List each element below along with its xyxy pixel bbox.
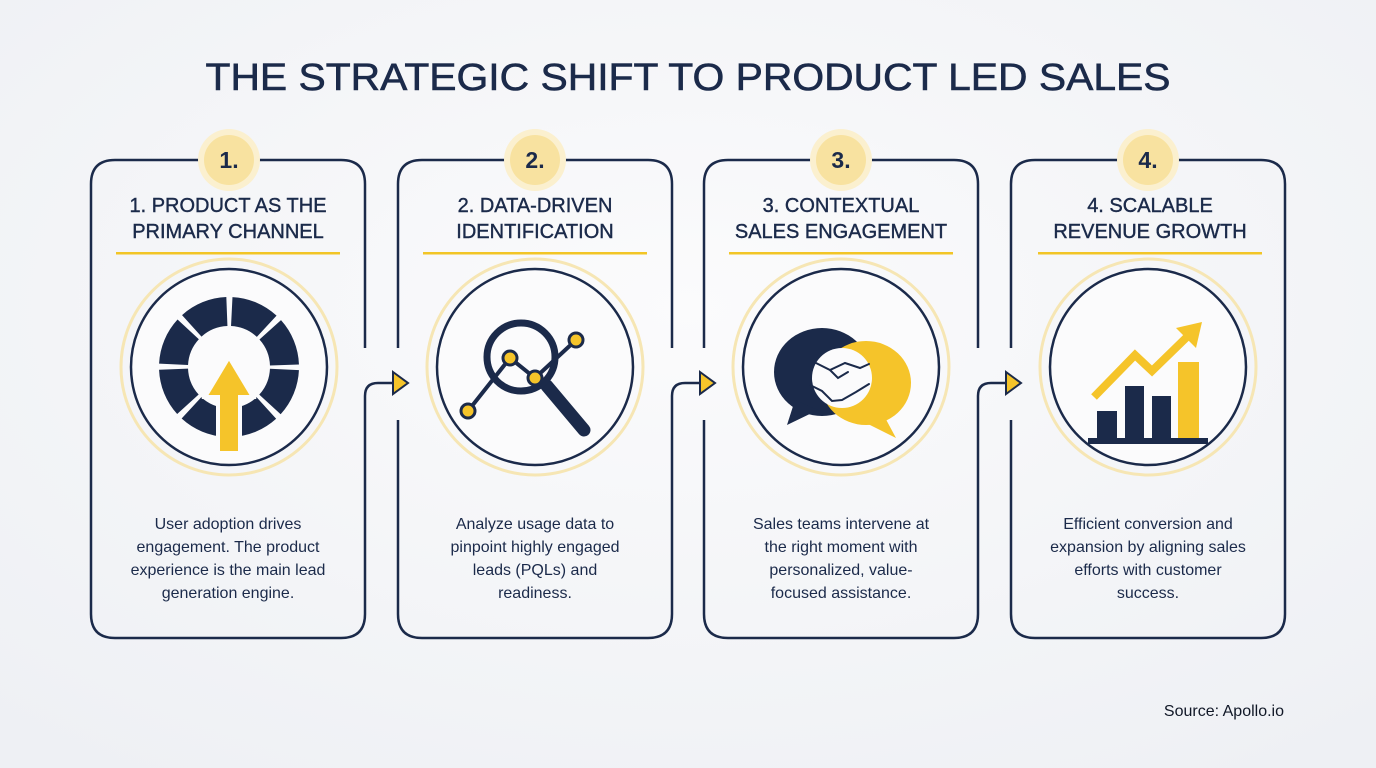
icon: bar chart growth xyxy=(1040,259,1256,475)
heading 2: IDENTIFICATION xyxy=(456,221,614,243)
icon: magnifier chart xyxy=(427,259,643,475)
title: THE STRATEGIC SHIFT TO PRODUCT LED SALES xyxy=(206,57,1170,99)
badge 4 xyxy=(1117,129,1179,191)
icon: growth ring xyxy=(121,259,337,475)
badge 2 xyxy=(504,129,566,191)
heading 2: 2. DATA-DRIVEN xyxy=(458,195,612,217)
heading 4 xyxy=(1053,195,1247,243)
heading 1: PRIMARY CHANNEL xyxy=(132,221,324,243)
text 4: efforts with customer xyxy=(1074,562,1222,579)
icon: handshake bubbles xyxy=(733,259,949,475)
badge 3 xyxy=(810,129,872,191)
source note: Source: Apollo.io xyxy=(1164,703,1284,720)
badge 3: 3. xyxy=(831,147,851,173)
badge 2: 2. xyxy=(525,147,545,173)
arrow 1 xyxy=(365,372,408,420)
heading 1 xyxy=(129,195,327,243)
text 4: expansion by aligning sales xyxy=(1050,539,1246,556)
text 2: leads (PQLs) and xyxy=(473,562,597,579)
text 1: experience is the main lead xyxy=(131,562,325,579)
heading 3 xyxy=(735,195,947,243)
heading 3: 3. CONTEXTUAL xyxy=(763,195,919,217)
card 1 xyxy=(91,129,365,638)
heading 1: 1. PRODUCT AS THE xyxy=(129,195,327,217)
badge 4: 4. xyxy=(1138,147,1158,173)
badge 1 xyxy=(198,129,260,191)
text 2: Analyze usage data to xyxy=(456,516,614,533)
badge 1: 1. xyxy=(219,147,239,173)
card 3 xyxy=(704,129,978,638)
text 3: the right moment with xyxy=(765,539,917,556)
card 2 xyxy=(398,129,672,638)
text 2: pinpoint highly engaged xyxy=(450,539,620,556)
text 4 xyxy=(1050,516,1246,602)
text 1: generation engine. xyxy=(162,585,294,602)
text 1: engagement. The product xyxy=(137,539,320,556)
card 4 xyxy=(1011,129,1285,638)
text 3: personalized, value- xyxy=(769,562,913,579)
text 3: Sales teams intervene at xyxy=(753,516,930,533)
arrow 3 xyxy=(978,372,1021,420)
text 3: focused assistance. xyxy=(771,585,911,602)
text 3 xyxy=(753,516,930,602)
heading 2 xyxy=(456,195,614,243)
text 4: success. xyxy=(1117,585,1179,602)
arrow 2 xyxy=(672,372,715,420)
heading 3: SALES ENGAGEMENT xyxy=(735,221,947,243)
text 2: readiness. xyxy=(498,585,572,602)
heading 4: REVENUE GROWTH xyxy=(1053,221,1247,243)
text 1 xyxy=(131,516,325,602)
text 4: Efficient conversion and xyxy=(1063,516,1233,533)
text 1: User adoption drives xyxy=(155,516,301,533)
text 2 xyxy=(450,516,620,602)
heading 4: 4. SCALABLE xyxy=(1087,195,1213,217)
